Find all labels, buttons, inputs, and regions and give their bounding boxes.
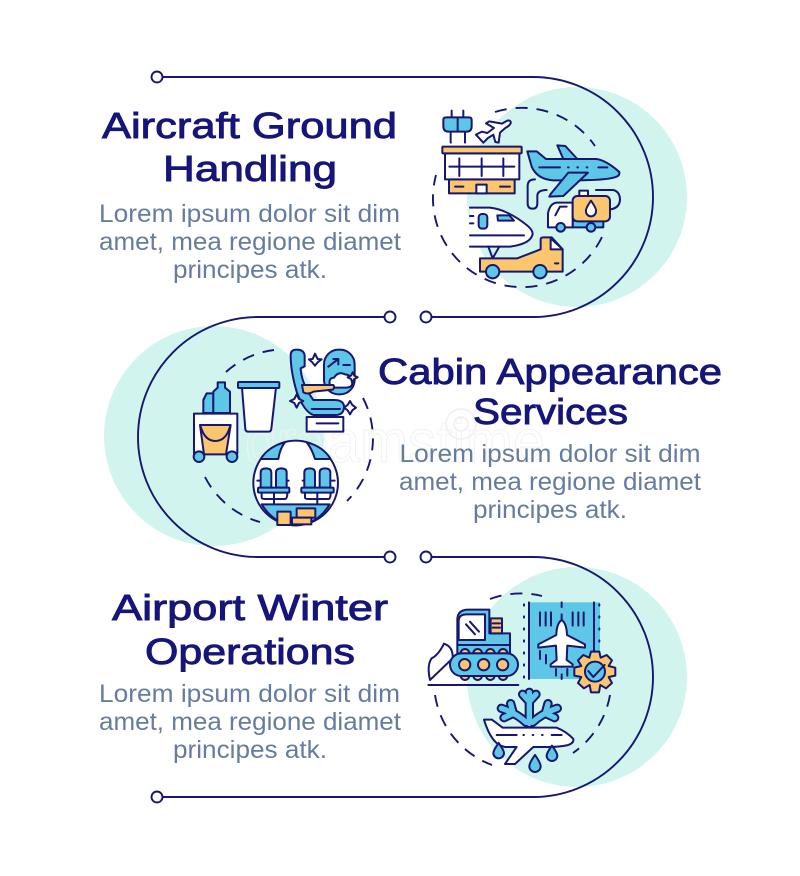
icon: waste bin: [238, 382, 279, 432]
icon: airport terminal: [442, 147, 522, 193]
icon: runway with plane: [524, 602, 600, 679]
heading: Airport Winter Operations: Operations: [145, 631, 355, 672]
text block: section 2: [399, 440, 701, 524]
icon group: ground handling: [442, 111, 620, 278]
icon group: winter operations: [428, 602, 615, 772]
heading: Airport Winter Operations: Airport Winter: [112, 587, 388, 628]
dashed ring: section 1: [433, 108, 602, 287]
icon: snow plough bulldozer: [428, 610, 518, 685]
icon: cleaning cart: [194, 382, 237, 462]
heading: Cabin Appearance Services: Cabin Appearance: [378, 351, 722, 392]
heading: Aircraft Ground Handling: Handling: [163, 148, 337, 189]
text block: section 1: principes atk.: [173, 256, 327, 284]
icon: airliner: [527, 145, 619, 209]
icon: clean seat with window: [290, 350, 358, 432]
icon: aircraft nose and tow truck: [470, 208, 563, 278]
icon: cabin interior circle: [253, 441, 338, 525]
text block: section 3: [99, 680, 401, 764]
text block: section 1: Lorem ipsum dolor sit dim: [99, 200, 400, 228]
icon group: cabin appearance: [194, 350, 358, 525]
watermark: dreamstime: [245, 408, 545, 475]
background circle: section 2: [104, 326, 324, 546]
text block: section 1: [99, 200, 401, 284]
heading: Aircraft Ground Handling: Aircraft Ground: [102, 105, 397, 146]
heading: Aircraft Ground Handling: [102, 105, 397, 189]
text block: section 1: amet, mea regione diamet: [99, 228, 401, 256]
background circle: section 3: [467, 567, 687, 787]
icon: snowflake: [501, 692, 557, 723]
connector line: section 1: [152, 72, 653, 322]
text block: section 3: amet, mea regione diamet: [99, 708, 401, 736]
icon: gear with checkmark: [574, 652, 615, 692]
heading: Airport Winter Operations: [112, 587, 388, 672]
heading: Cabin Appearance Services: Services: [473, 391, 628, 432]
text block: section 3: principes atk.: [173, 736, 327, 764]
icon: fuel truck: [548, 190, 620, 232]
dashed ring: section 2: [205, 350, 373, 522]
background circle: section 1: [467, 87, 687, 307]
connector line: section 2: [138, 312, 396, 562]
icon: de-icing plane: [484, 720, 573, 772]
heading: Cabin Appearance Services: [378, 351, 722, 432]
dashed ring: section 3: [435, 593, 610, 765]
text block: section 2: principes atk.: [473, 496, 627, 524]
connector line: section 3: [152, 552, 653, 802]
text block: section 2: Lorem ipsum dolor sit dim: [400, 440, 700, 468]
icon: small departing plane: [476, 121, 511, 143]
text block: section 2: amet, mea regione diamet: [399, 468, 701, 496]
text block: section 3: Lorem ipsum dolor sit dim: [99, 680, 400, 708]
icon: control tower: [443, 111, 472, 143]
